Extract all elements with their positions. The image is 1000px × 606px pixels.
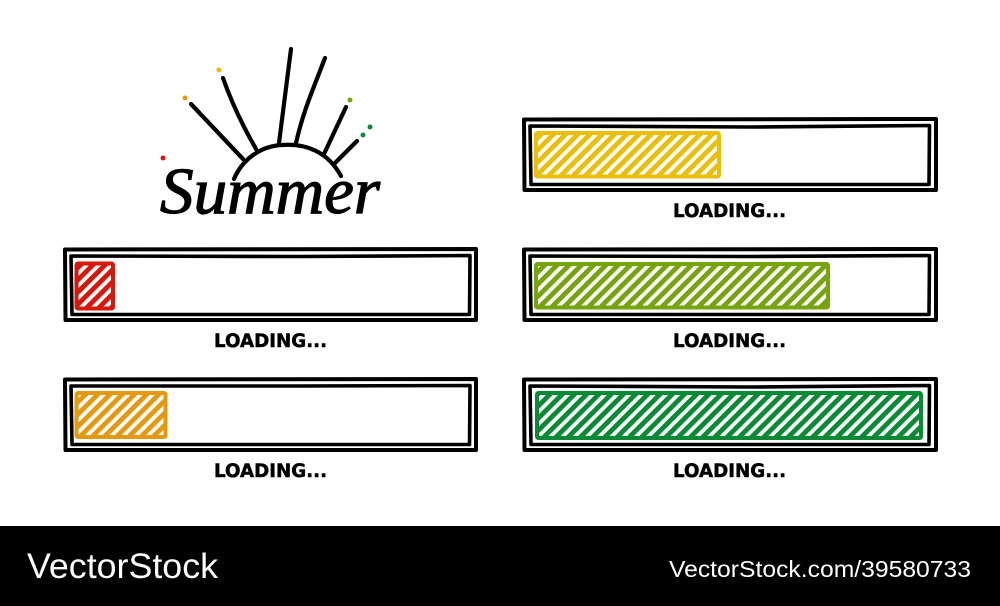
progress bar: orange	[65, 379, 476, 482]
sun arc	[234, 145, 341, 179]
label: LOADING...	[214, 331, 327, 352]
progress bar: yellow	[524, 119, 936, 222]
progress bar: olive green	[524, 249, 936, 352]
footer band	[0, 526, 1000, 606]
label: LOADING...	[214, 461, 327, 482]
sun rays	[191, 49, 357, 163]
progress bar: red	[65, 249, 476, 352]
footer image id: VectorStock.com/39580733	[669, 556, 971, 582]
label: LOADING...	[673, 201, 786, 222]
icon: summer sun with rays and lettering	[160, 49, 380, 228]
footer logo text: VectorStock	[27, 547, 219, 586]
coloured dots	[160, 68, 372, 160]
label: LOADING...	[673, 461, 786, 482]
progress bar: green	[524, 379, 936, 482]
label: LOADING...	[673, 331, 786, 352]
heading: Summer: Summer	[160, 155, 380, 228]
